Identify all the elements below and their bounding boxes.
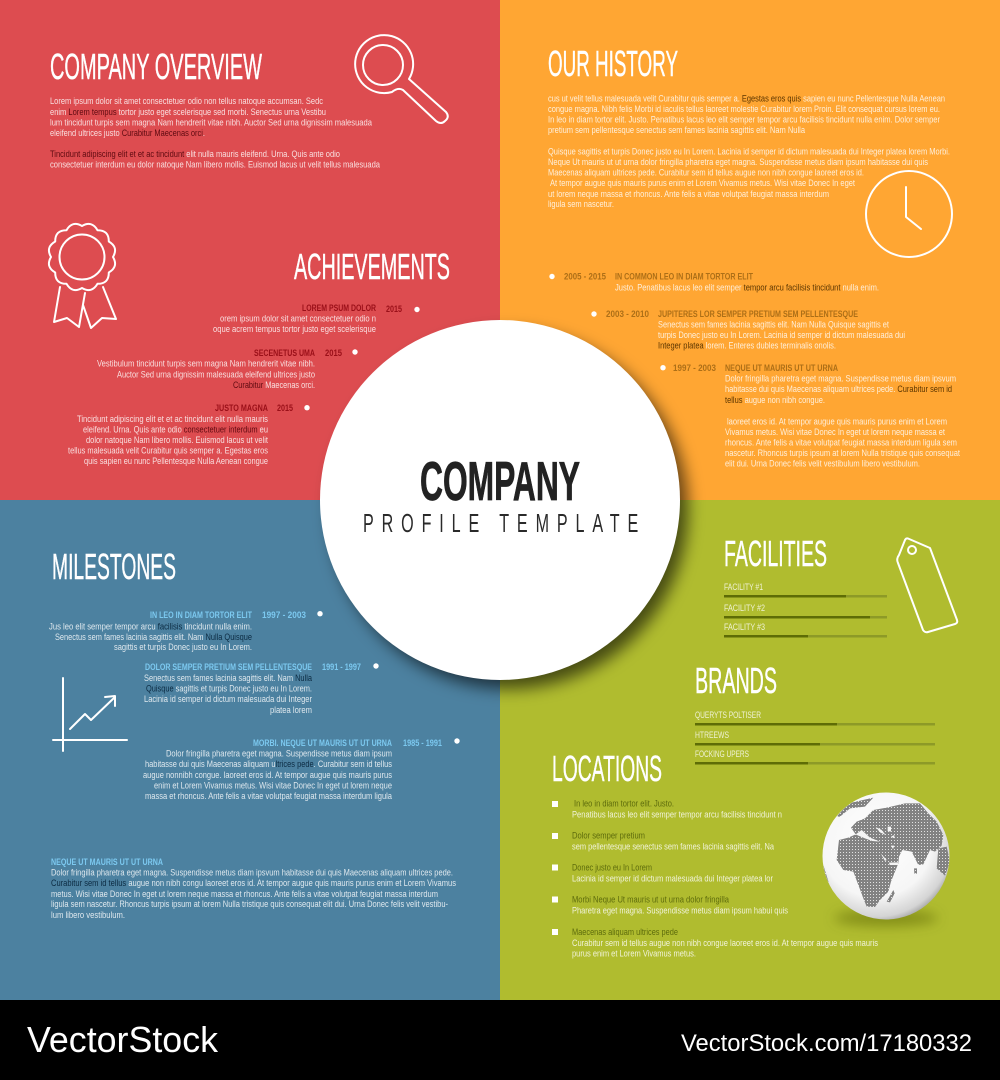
timeline item: 2005 - 2015 [549,272,879,293]
title: company: COMPANY [420,450,580,512]
list: locations: In leo in diam tortor elit. Justo. [574,799,674,809]
heading: facilities: FACILITIES [724,533,827,574]
timeline item: 1997 - 2003: 1997 - 2003 [262,610,306,621]
timeline item: 1997 - 2003: nascetur. Rhoncus turpis ipsum at lorem Nulla tristique quis consequat [725,448,960,458]
timeline item: 1997 - 2003: Senectus sem fames lacinia sagittis elit. Nam Nulla Quisque [55,632,252,642]
timeline item: secenetus uma 2015: Curabitur Maecenas orci. [233,380,315,390]
heading: locations: LOCATIONS [552,748,662,789]
list: locations: Lacinia id semper id dictum malesuada dui Integer platea lor [572,874,773,884]
timeline item: lorem psum dolor 2015: orem ipsum dolor sit amet consectetuer odio n [220,314,376,324]
timeline item: 2003 - 2010: Integer platea lorem. Enteres dubles terminalis onolis. [658,340,836,350]
icon: globe [822,792,950,926]
text block: overview copy: Tincidunt adipiscing elit et et ac tincidunt elit nulla mauris eleifend. Urna. Quis ante odio [50,149,340,159]
timeline item: lorem psum dolor 2015: 2015 [386,304,403,315]
footer bar: vectorstock [0,1000,1000,1080]
panel: company overview and achievements [0,0,500,500]
icon: price tag [897,538,957,632]
timeline item: secenetus uma 2015: SECENETUS UMA [254,348,315,359]
timeline item: justo magna 2015: JUSTO MAGNA [215,403,268,414]
bar chart: brands [695,710,935,764]
timeline item: secenetus uma 2015: Vestibulum tincidunt turpis sem magna Nam hendrerit vitae nibh. [97,359,315,369]
text block: history copy: At tempor augue quis mauris purus enim et Lorem Vivamus metus. Wisi vitae Donec In eget [550,178,855,188]
text block: neque ut mauris: metus. Wisi vitae Donec In eget ut lorem neque massa et rhoncus. Ante felis a vitae volutpat feugiat massa interdum [51,889,438,899]
timeline item: 1991 - 1997: platea lorem [270,705,312,715]
timeline item: justo magna 2015: tellus malesuada velit Curabitur quis semper a. Egestas eros [68,446,268,456]
timeline item: 1997 - 2003: Jus leo elit semper tempor arcu facilisis tincidunt nulla enim. [49,621,252,631]
timeline item: 1985 - 1991: massa et rhoncus. Ante felis a vitae volutpat feugiat massa interdum ligula [145,791,392,801]
heading: brands: BRANDS [695,660,777,701]
icon: clock [866,171,952,257]
timeline item: 1997 - 2003: laoreet eros id. At tempor augue quis mauris purus enim et Lorem [727,416,947,426]
bar chart: facilities [724,582,887,638]
timeline item: 1997 - 2003 [49,610,323,652]
bar chart: facilities: FACILITY #1 [724,582,763,592]
subtitle: profile template: PROFILE TEMPLATE [363,508,638,538]
text block: overview copy: Lorem ipsum dolor sit amet consectetuer odio non tellus natoque accumsan. Sedc [50,96,323,106]
timeline item: 1997 - 2003: IN LEO IN DIAM TORTOR ELIT [150,610,252,621]
list: locations: Maecenas aliquam ultrices pede [572,927,678,937]
timeline item: secenetus uma 2015: 2015 [325,348,343,359]
text block: history copy: Maecenas aliquam ultrices pede. Curabitur sem id tellus augue non nibh congue laoreet eros id. [548,168,864,178]
bar chart: brands: QUERYTS POLTISER [695,710,761,720]
list: locations: Morbi Neque Ut mauris ut ut urna dolor fringilla [572,895,729,905]
timeline item: lorem psum dolor 2015 [213,303,420,334]
timeline item: justo magna 2015: Tincidunt adipiscing elit et et ac tincidunt elit nulla mauris [77,414,268,424]
list: locations: Dolor semper pretium [572,831,645,841]
timeline item: 2005 - 2015: Justo. Penatibus lacus leo elit semper tempor arcu facilisis tincidunt nulla enim. [615,283,879,293]
text block: overview copy: lum tincidunt turpis sem magna Nam hendrerit vitae nibh. Auctor Sed urna dignissim malesuada [50,118,372,128]
list: locations: Pharetra eget magna. Suspendisse metus diam ipsum habui quis [572,906,788,916]
text block: history copy [548,94,950,209]
bar chart: facilities: FACILITY #3 [724,622,765,632]
logo: vectorstock: VectorStock [27,1019,219,1060]
timeline item: 1985 - 1991: Dolor fringilla pharetra eget magna. Suspendisse metus diam ipsum [166,749,392,759]
timeline item: secenetus uma 2015: Auctor Sed urna dignissim malesuada eleifend ultrices justo [117,370,315,380]
text block: overview copy: eleifend ultrices justo Curabitur Maecenas orci. [50,128,205,138]
text block: overview copy [50,96,380,170]
icon: growth chart [53,678,127,751]
center circle: company profile template [320,320,688,689]
text block: neque ut mauris: NEQUE UT MAURIS UT UT URNA [51,857,163,868]
timeline item: justo magna 2015: 2015 [277,403,294,414]
timeline item: 2005 - 2015: IN COMMON LEO IN DIAM TORTOR ELIT [615,272,753,282]
timeline item: 1985 - 1991 [143,738,460,801]
timeline item: justo magna 2015: dolor natoque Nam libero mollis. Euismod lacus ut velit [86,435,268,445]
timeline item: lorem psum dolor 2015: oque acrem tempus tortor justo eget scelerisque [213,324,376,334]
timeline item: 1997 - 2003: 1997 - 2003 [673,363,716,374]
list: locations: purus enim et Lorem Vivamus metus. [572,948,696,958]
timeline item: justo magna 2015 [68,403,310,466]
text block: neque ut mauris: Dolor fringilla pharetra eget magna. Suspendisse metus diam ipsvum habitasse dui quis Maecenas aliquam ultrices pede. [51,868,453,878]
timeline item: 1997 - 2003: Dolor fringilla pharetra eget magna. Suspendisse metus diam ipsvum [725,374,956,384]
timeline item: 1991 - 1997: Quisque sagittis et turpis Donec justo eu In Lorem. [146,684,312,694]
text block: overview copy: enim Lorem tempus tortor justo eget scelerisque sed morbi. Senectus urna Vestibu [50,107,326,117]
timeline item: 1985 - 1991: 1985 - 1991 [403,738,443,749]
timeline item: 2003 - 2010: turpis Donec justo eu In Lorem. Lacinia id semper id dictum malesuada dui [658,330,905,340]
timeline item: 1997 - 2003: NEQUE UT MAURIS UT UT URNA [725,363,838,374]
text block: neque ut mauris: lum libero vestibulum. [51,910,125,920]
timeline item: 1991 - 1997: Lacinia id semper id dictum malesuada dui Integer [144,694,312,704]
text block: overview copy: consectetuer interdum eu dolor natoque Nam libero mollis. Euismod lacus ut velit tellus malesuada [50,160,380,170]
list: locations: Curabitur sem id tellus augue non nibh congue laoreet eros id. At tempor augue quis mauris [572,938,878,948]
text block: history copy: ligula sem nascetur. [548,199,614,209]
timeline item: 1997 - 2003: rhoncus. Ante felis a vitae volutpat feugiat massa interdum ligula sem [725,438,957,448]
timeline item: 1997 - 2003: Vivamus metus. Wisi vitae Donec In eget ut lorem neque massa et [725,427,945,437]
timeline item: 1985 - 1991: enim et Lorem Vivamus metus. Wisi vitae Donec In eget ut lorem neque [154,780,392,790]
icon: award ribbon [49,224,116,328]
timeline item: 1991 - 1997: Senectus sem fames lacinia sagittis elit. Nam Nulla [144,673,312,683]
list: locations [552,799,878,958]
text block: neque ut mauris [51,857,456,920]
bar chart: brands: FOCKING UPERS [695,749,749,759]
timeline item: 2003 - 2010: 2003 - 2010 [606,309,649,320]
image id: vectorstock url: VectorStock.com/17180332 [681,1030,972,1057]
timeline item: 2003 - 2010 [591,309,905,350]
list: locations: Penatibus lacus leo elit semper tempor arcu facilisis tincidunt n [572,810,782,820]
timeline item: 1985 - 1991: MORBI. NEQUE UT MAURIS UT UT URNA [253,738,392,749]
text block: history copy: pretium sem pellentesque senectus sem fames lacinia sagittis elit. Nam Nulla [548,125,805,135]
text block: neque ut mauris: Curabitur sem id tellus augue non nibh congu laoreet eros id. At tempor augue quis mauris purus enim et Lorem Vivamus [51,878,456,888]
timeline item: secenetus uma 2015 [97,348,358,390]
timeline item: 1997 - 2003: sagittis et turpis Donec justo eu In Lorem. [114,642,252,652]
timeline item: 2005 - 2015: 2005 - 2015 [564,272,607,282]
timeline item: 1997 - 2003: habitasse dui quis Maecenas aliquam ultrices pede. Curabitur sem id [725,384,952,394]
timeline item: 2003 - 2010: Senectus sem fames lacinia sagittis elit. Nam Nulla Quisque sagittis et [658,320,889,330]
timeline item: 1985 - 1991: augue nonnibh congue. laoreet eros id. At tempor augue quis mauris purus [143,770,392,780]
timeline item: 1985 - 1991: habitasse dui quis Maecenas aliquam ultrices pede. Curabitur sem id tellus [145,759,392,769]
timeline item: 2003 - 2010: JUPITERES LOR SEMPER PRETIUM SEM PELLENTESQUE [658,309,858,320]
bar chart: facilities: FACILITY #2 [724,603,765,613]
list: locations: Donec justo eu In Lorem [572,863,652,873]
timeline item: 1997 - 2003: tellus augue non nibh congue. [725,395,825,405]
timeline item: justo magna 2015: eleifend. Urna. Quis ante odio consectetuer interdum eu [83,424,268,434]
timeline item: justo magna 2015: quis sapien eu nunc Pellentesque Nulla Aenean congue [84,456,268,466]
timeline item: 1991 - 1997: DOLOR SEMPER PRETIUM SEM PELLENTESQUE [145,662,312,673]
panel: our history [500,0,1000,500]
timeline item: 1991 - 1997 [144,662,379,715]
list: locations: sem pellentesque senectus sem fames lacinia sagittis elit. Na [572,842,774,852]
heading: our history: OUR HISTORY [548,43,678,84]
text block: neque ut mauris: ligula sem nascetur. Rhoncus turpis ipsum at lorem Nulla tristique quis consequat elit dui. Urna Donec felis velit vestibu- [51,899,448,909]
text block: history copy: cus ut velit tellus malesuada velit Curabitur quis semper a. Egestas eros quis sapien eu nunc Pellentesque Nulla Aenean [548,94,945,104]
heading: company overview: COMPANY OVERVIEW [50,46,262,87]
text block: history copy: Neque Ut mauris ut ut urna dolor fringilla pharetra eget magna. Suspendisse metus diam ipsum habitasse dui quis [548,157,928,167]
panel: facilities, brands and locations [500,500,1000,1000]
text block: history copy: ut lorem neque massa et rhoncus. Ante felis a vitae volutpat feugiat massa interdum [548,189,829,199]
timeline item: 1991 - 1997: 1991 - 1997 [322,662,361,673]
icon: magnifying glass [355,35,448,123]
timeline item: lorem psum dolor 2015: LOREM PSUM DOLOR [302,303,376,314]
heading: milestones: MILESTONES [52,546,176,587]
bar chart: brands: HTREEWS [695,730,729,740]
timeline item: 1997 - 2003: elit dui. Urna Donec felis velit vestibulum libero vestibulum. [725,458,920,468]
timeline item: 1997 - 2003 [660,363,960,468]
panel: milestones [0,500,500,1000]
heading: achievements: ACHIEVEMENTS [294,246,450,287]
